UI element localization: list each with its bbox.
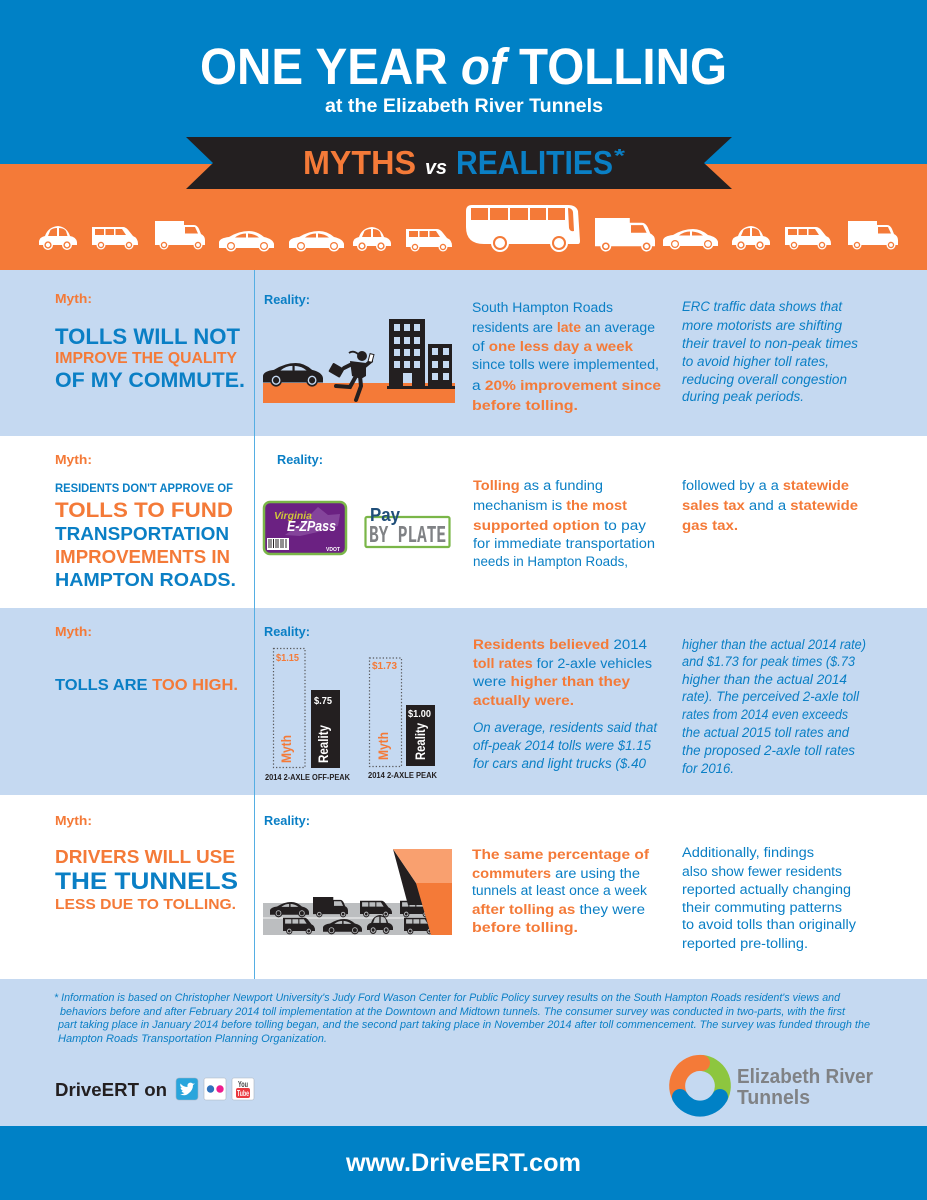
myth 1 heading: OF MY COMMUTE.: [55, 368, 245, 392]
reality label: Reality:: [264, 293, 310, 307]
myth 4 heading: Myth:: [55, 814, 92, 828]
text: reality column 2: rates from 2014 even exceeds: [682, 707, 848, 723]
icon: youtube: You: [238, 1080, 248, 1089]
text: reality column 1: of one less day a week: [472, 339, 633, 355]
text: reality column 1: South Hampton Roads: [472, 300, 613, 316]
text: reality column 2: sales tax and a statewide: [682, 498, 858, 514]
social media line: DriveERT on: [55, 1080, 167, 1100]
text: reality column 2: [682, 299, 858, 405]
myth 2 heading: IMPROVEMENTS IN: [55, 546, 230, 567]
footnote: part taking place in January 2014 before tolling began, and the second part taking place in November 2014 after toll commencement. The survey was funded through the: [57, 1019, 870, 1031]
social media line: [55, 1078, 254, 1100]
text: reality column 2: rate). The perceived 2-axle toll: [682, 689, 860, 705]
text: reality column 2: their travel to non-peak times: [682, 336, 858, 352]
text: reality column 2: and $1.73 for peak times ($.73: [682, 654, 855, 670]
myth 3 heading: TOLLS ARE TOO HIGH.: [55, 677, 238, 694]
text: reality column 1: residents are late an average: [472, 320, 655, 336]
bar chart: off-peak toll: [265, 648, 350, 782]
text: reality column 1: before tolling.: [472, 920, 578, 936]
text: reality column 1: after tolling as they were: [472, 902, 645, 918]
bar chart: peak toll: Reality: [412, 723, 428, 760]
text: reality column 1: since tolls were implemented,: [472, 357, 659, 373]
icon: youtube: [232, 1078, 254, 1100]
text: reality column 2: gas tax.: [682, 518, 738, 534]
text: reality column 2: reported actually changing: [682, 882, 851, 898]
header band: [0, 0, 927, 164]
text: reality column 2: the proposed 2-axle toll rates: [682, 743, 855, 759]
text: reality column 1: [472, 637, 658, 772]
banner: myths vs realities: MYTHS: [303, 144, 416, 181]
icon: E-ZPass card: Virginia: [274, 511, 312, 522]
text: reality column 1: actually were.: [473, 693, 574, 709]
icon: twitter: [176, 1078, 198, 1100]
bar chart: peak toll: Myth: [375, 732, 391, 760]
icon: bus: [466, 205, 580, 252]
icon: Pay by Plate logo: [366, 505, 450, 550]
footnote: behaviors before and after February 2014 toll implementation at the Downtown and Midtown tunnels. The consumer survey was conducted in two-parts, with the first: [60, 1006, 846, 1018]
text: reality column 2: reducing overall congestion: [682, 372, 847, 388]
traffic line of vehicles: [39, 205, 898, 252]
text: reality column 1: before tolling.: [472, 398, 578, 414]
bar chart: off-peak toll: Myth: [278, 735, 294, 763]
bar chart: peak toll: $1.73: [372, 661, 397, 672]
text: reality column 2: Additionally, findings: [682, 845, 814, 861]
panel: row 3 toll rates: [55, 625, 866, 782]
icon: flickr: [204, 1078, 226, 1100]
bar chart: peak toll: [368, 658, 437, 780]
banner: myths vs realities: [186, 137, 732, 189]
myth 1 heading: IMPROVE THE QUALITY: [55, 350, 238, 367]
icon: E-ZPass card: E-ZPass: [287, 518, 336, 535]
myth 4 heading: [55, 814, 238, 913]
text: reality column 2: also show fewer residents: [682, 864, 842, 880]
text: reality column 2: more motorists are shifting: [682, 318, 842, 334]
banner: myths vs realities: *: [614, 146, 625, 166]
myth 2 heading: TOLLS TO FUND: [55, 498, 233, 522]
text: reality column 1: for cars and light trucks ($.40: [473, 756, 646, 772]
text: reality column 2: during peak periods.: [682, 389, 804, 405]
text: reality column 1: [472, 300, 661, 414]
bar chart: peak toll: $1.00: [408, 709, 431, 720]
text: reality column 1: off-peak 2014 tolls were $1.15: [473, 738, 651, 754]
myth 3 heading: [55, 625, 238, 694]
text: reality column 1: toll rates for 2-axle vehicles: [473, 656, 652, 672]
text: reality column 2: to avoid higher toll rates,: [682, 354, 829, 370]
icon: E-ZPass card: VDOT: [326, 547, 340, 553]
logo: Elizabeth River Tunnels: Tunnels: [737, 1087, 810, 1109]
panel: row 2 approval: [55, 453, 858, 590]
myth 4 heading: DRIVERS WILL USE: [55, 847, 235, 867]
text: reality column 2: higher than the actual 2014: [682, 672, 847, 688]
banner: myths vs realities: REALITIES: [456, 144, 613, 181]
text: reality column 2: [682, 845, 857, 952]
footer band with website: [0, 1126, 927, 1200]
myth 2 heading: Myth:: [55, 453, 92, 467]
footnote: * Information is based on Christopher Newport University's Judy Ford Wason Center for Public Policy survey results on the South Hampton Roads resident's views and: [54, 992, 841, 1004]
reality label: Reality:: [264, 625, 310, 639]
reality label: Reality:: [264, 814, 310, 828]
text: reality column 1: [473, 478, 655, 570]
title: at the Elizabeth River Tunnels: [325, 96, 603, 117]
myth 4 heading: THE TUNNELS: [55, 868, 238, 895]
bar chart: off-peak toll: $.75: [314, 696, 332, 707]
text: reality column 2: [682, 478, 858, 534]
orange traffic band: [0, 164, 927, 270]
bar chart: off-peak toll: 2014 2-AXLE OFF-PEAK: [265, 773, 350, 782]
text: reality column 2: their commuting patterns: [682, 900, 842, 916]
myth 2 heading: TRANSPORTATION: [55, 523, 229, 544]
text: reality column 1: for immediate transportation: [473, 536, 655, 552]
icon: commuter running from car to office: [263, 319, 455, 403]
text: reality column 2: reported pre-tolling.: [682, 936, 808, 952]
bar chart: off-peak toll: Reality: [315, 725, 331, 763]
bar chart: off-peak toll: $1.15: [276, 653, 299, 664]
myth 2 heading: RESIDENTS DON'T APPROVE OF: [55, 483, 233, 495]
banner: myths vs realities: vs: [425, 157, 447, 179]
text: reality column 1: Residents believed 2014: [473, 637, 647, 653]
panel: row 1 commute: [55, 292, 858, 414]
text: reality column 2: the actual 2015 toll rates and: [682, 725, 850, 741]
text: reality column 1: On average, residents said that: [473, 720, 658, 736]
myth 3 heading: Myth:: [55, 625, 92, 639]
text: reality column 2: for 2016.: [682, 761, 734, 777]
logo: Elizabeth River Tunnels: [677, 1063, 873, 1109]
myth 1 heading: Myth:: [55, 292, 92, 306]
text: reality column 2: ERC traffic data shows that: [682, 299, 843, 315]
icon: Pay by Plate logo: BY PLATE: [369, 523, 446, 550]
text: reality column 1: commuters are using the: [472, 866, 640, 882]
logo: Elizabeth River Tunnels: Elizabeth River: [737, 1066, 873, 1088]
text: reality column 2: to avoid tolls than originally: [682, 917, 857, 933]
footnote: Hampton Roads Transportation Planning Organization.: [58, 1033, 327, 1045]
text: reality column 2: higher than the actual 2014 rate): [682, 637, 866, 653]
myth 2 heading: [55, 453, 236, 590]
footnote: [54, 992, 870, 1045]
text: reality column 1: needs in Hampton Roads,: [473, 554, 628, 570]
bar chart: peak toll: 2014 2-AXLE PEAK: [368, 771, 437, 780]
row backgrounds: [0, 270, 927, 1126]
myth 1 heading: TOLLS WILL NOT: [55, 324, 240, 349]
title: ONE YEAR of TOLLING: [200, 38, 727, 95]
text: reality column 1: were higher than they: [472, 674, 630, 690]
footer band with website: www.DriveERT.com: [345, 1149, 581, 1177]
icon: youtube: Tube: [237, 1089, 249, 1098]
panel: row 4 tunnels: [55, 814, 857, 952]
text: reality column 2: [682, 637, 866, 777]
myth 1 heading: [55, 292, 245, 392]
reality label: Reality:: [277, 453, 323, 467]
text: reality column 1: mechanism is the most: [473, 498, 627, 514]
text: reality column 1: Tolling as a funding: [473, 478, 603, 494]
icon: vehicles entering tunnel: [263, 849, 452, 935]
text: reality column 1: tunnels at least once a week: [472, 883, 648, 899]
text: reality column 1: supported option to pay: [473, 518, 647, 534]
text: reality column 1: [472, 847, 649, 936]
text: reality column 2: followed by a a statewide: [682, 478, 849, 494]
text: reality column 1: a 20% improvement since: [472, 378, 661, 394]
myth 4 heading: LESS DUE TO TOLLING.: [55, 896, 236, 913]
myth 2 heading: HAMPTON ROADS.: [55, 569, 236, 590]
icon: Pay by Plate logo: Pay: [370, 505, 400, 525]
icon: E-ZPass card: [264, 502, 346, 554]
text: reality column 1: The same percentage of: [472, 847, 649, 863]
